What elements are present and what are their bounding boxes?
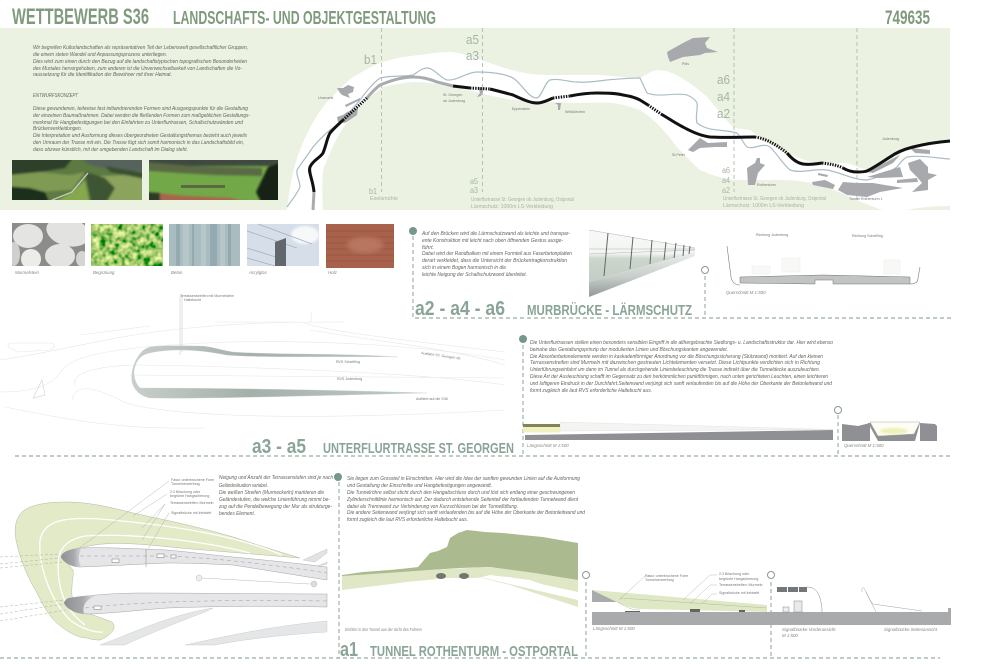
plan: terrace lines: [40, 518, 282, 632]
text: Unterflurtrassen: Unterführungseinfahrt um dann im Tunnel als durchgehende Linienbeleuchtung die Trasse indirekt über die Tunneldecke auszuleuchten.: [530, 367, 820, 373]
material: Holz: Holz: [328, 270, 338, 275]
signal bridge views: M 1:500: [782, 633, 798, 638]
text: Lärmschutz: Auf den Brücken wird die Lärmschutzwand als leichte und transpar-: [421, 231, 570, 237]
text: Neigung: zug auf die Pendelbewegung der Mur als strukturge-: [218, 504, 332, 510]
signal bridge views: Signalbrücke Seitenansicht: [884, 627, 938, 632]
panel: a2-a4-a6 Murbrücke: [409, 227, 952, 320]
intro text: raussetzung für die Identifikation der Bewohner mit ihrer Heimat.: [33, 72, 172, 78]
town labels: Pöls: [682, 62, 689, 66]
cross section: Querschnitt M 1:500: [844, 443, 884, 448]
cross section: Querschnitt M 1:500: [726, 290, 766, 295]
section line: a3 a5: Lärmschutz: 1000m LS-Verkleidung: [471, 204, 553, 210]
text: Neigung: bendes Element.: [219, 511, 255, 517]
text: Unterflurtrassen: Die Unterflurtrassen stellen einen besonders sensiblen Eingriff in die althergebrachte Siedlungs- u. Landschaftsstruktur dar. Hier wird ebenso: [530, 340, 833, 346]
text: Unterflurtrassen: formt zugleich die laut RVS erforderliche Haltebucht aus.: [530, 388, 652, 394]
map background: [0, 28, 950, 210]
material: Murmelstein: [12, 223, 85, 274]
marker open: [834, 406, 842, 414]
text: Unterflurtrassen: Diese Art der Ausleuchtung schafft im Gegensatz zu den herkömmlichen punktförmigen, nach unten gerichteten Leuchten, einen leichteren: [530, 374, 828, 380]
plan: labels: RVS Judenburg: [337, 377, 362, 381]
text: Neigung: Geländestufen, die welche Linienführung nimmt be-: [219, 497, 330, 503]
longitudinal section: Terrassenstreifen: Murmeln: [719, 583, 763, 587]
cross section: Richtung Judenburg: [756, 233, 788, 237]
bridge rendering: [589, 230, 695, 297]
text: Unterflurtrassen: [530, 340, 833, 394]
longitudinal section: begrünte Hangsicherung: [719, 577, 758, 581]
town labels: [318, 62, 899, 201]
marker filled: [409, 227, 417, 235]
towns: [337, 37, 937, 197]
longitudinal section: [592, 572, 771, 631]
text: Einschnitte: formt zugleich die laut RVS erforderliche Haltebucht aus.: [347, 517, 468, 523]
plan: labels: Ausfahrt ST. Georgen ob: [421, 351, 461, 360]
text: Lärmschutz: derart verkleidet, dass die Untersicht der Brückentragkonstruktion: [422, 258, 567, 264]
text: Einschnitte: Sie liegen zum Grossteil in Einschnitten. Hier wird die Idee der sanften gewunden Linien auf die Ausformung: [347, 476, 581, 482]
subtitle: LANDSCHAFTS- UND OBJEKTGESTALTUNG: [173, 8, 436, 28]
town labels: Unzmarkt: [318, 96, 333, 100]
title: WETTBEWERB S36: [12, 4, 149, 29]
text: Neigung: Geländesituation variabel.: [219, 483, 268, 489]
text: Lärmschutz: [421, 231, 572, 278]
plan: callouts: Tunnelverwerfung: [171, 482, 200, 486]
plan: labels: Auffahrt auf die S36: [416, 397, 448, 401]
section line: a3 a5: a5: [466, 32, 479, 47]
marker open right: [768, 572, 774, 578]
text: Unterflurtrassen: Die Absorberbetonelemente werden in kaskadenförmiger Anordnung vor die Böschungssicherung (Stützwand) montiert. Auf den kleinen: [530, 354, 823, 360]
heading a3 a5: a3 - a5: [252, 436, 306, 458]
text: Einschnitte: Zylinderschnittlinie harmonisch auf. Der dadurch entstehende Seitenteil der fortlaufenden Tunnelwand dient: [346, 497, 578, 503]
signal bridge views: [771, 587, 951, 638]
longitudinal section: Signalbrücke mit Infotafel: [719, 591, 760, 595]
town labels: Judenburg: [882, 137, 899, 141]
plan: callouts: Fassi: unterbrochene Form: [171, 478, 214, 482]
intro text: die einem steten Wandel und Anpassungsprozess unterliegen.: [33, 52, 167, 58]
section line: a3 a5: a3: [466, 48, 479, 63]
material: Beton: Beton: [171, 270, 183, 275]
plan: callouts: 2:3 Böschung oder: [170, 490, 201, 494]
section line: a2 a4 a6: [717, 28, 826, 209]
section line: b1: b1: [369, 187, 377, 196]
text: Einschnitte: und Gestaltung der Einschnitte und Hangbefestigungen angewandt.: [347, 483, 492, 489]
marker filled: [334, 473, 342, 481]
plan: labels: [180, 294, 461, 401]
intro text: Wir begreifen Kulturlandschaften als repräsentativen Teil der Lebenswelt gesellschaftlicher Gruppen,: [33, 45, 248, 51]
plan: site lines: [0, 295, 505, 428]
text: Unterflurtrassen: und luftigeren Eindruck in der Durchfahrt.Seitenwand verjüngt sich sanft verlaufenden bis auf die Höhe der Oberkante der Betonleitwand und: [530, 381, 833, 387]
section line: a2 a4 a6: a2: [717, 106, 730, 121]
text: Einschnitte: Die andere Seitenwand verjüngt sich sanft verlaufenden bis auf die Höhe der Oberkante der Betonleitwand und: [347, 510, 586, 516]
text: Einschnitte: dabei als Trennwand zur Verhinderung von Kurzschlüssen bei der Tunnellüftung.: [347, 504, 518, 510]
title Murbrücke: MURBRÜCKE - LÄRMSCHUTZ: [527, 302, 692, 319]
material: Beton: [169, 224, 240, 275]
town labels: Eppenstein: [512, 107, 530, 111]
town labels: Tunnel Rothenturm 1: [849, 197, 883, 201]
longitudinal section: 2:3 Böschung oder: [719, 572, 750, 576]
section line: a2 a4 a6: a2: [722, 186, 730, 195]
intro text: Diese gewundenen, teilweise fast initiandrierenden Formen sind Ausgangspunkte für die Gestaltung: [33, 106, 249, 112]
town labels: St.Peter: [672, 153, 686, 157]
plan: callouts: Terrassenstreifen: Murmeln: [170, 501, 214, 505]
text: Neigung: [218, 475, 333, 517]
intro text: Dies wird zum einen durch den Bezug auf die landschaftstypischen topografischen Besonderheiten: [33, 59, 247, 65]
longitudinal section: Tunnelverwerfung: [645, 578, 674, 582]
section line: a2 a4 a6: a4: [717, 89, 730, 104]
intro text: ENTWURFSKONZEPT: [33, 93, 78, 99]
cross section: [842, 422, 937, 448]
marker open: [702, 266, 708, 274]
text: Lärmschutz: ente Konstruktion mit leicht nach oben öffnenden Gestus ausge-: [422, 238, 563, 244]
plan: lower road: [64, 593, 327, 614]
intro text: den Umraum der Trasse mit ein. Die Trasse fügt sich somit harmonisch in das Landschaftsbild ein,: [33, 140, 244, 146]
section line: a3 a5: a3: [470, 186, 478, 195]
title Tunnel Rothenturm: TUNNEL ROTHENTURM - OSTPORTAL: [370, 643, 578, 660]
text: Unterflurtrassen: Terrassenstreifen sind Murmeln mit dazwischen gestreuten Lichtelementen versetzt. Diese Lichtpunkte verdichten sich in Richtung: [530, 360, 821, 366]
intro text: der einzelnen Baumaßnahmen. Dabei werden die fließenden Formen zum maßgeblichen Gestaltungs-: [33, 113, 250, 119]
section line: b1: Eselsmühle: [370, 196, 398, 202]
section line: a2 a4 a6: a4: [722, 176, 730, 185]
frame lines: [15, 345, 950, 456]
plan: tunnel walls: [132, 346, 427, 398]
intro text: merkmal für Hangbefestigungen bei den Einfahrten zu Unterflurtrassen, Schallschutzwänden und: [33, 120, 244, 126]
plan: labels: RVS Scheifling: [336, 360, 360, 364]
plan: callouts: [78, 478, 214, 549]
plan: green embankment: [15, 502, 300, 640]
intro text: [33, 45, 250, 153]
town labels: Weißkirchen: [565, 110, 585, 114]
heading a2 a4 a6: a2 - a4 - a6: [415, 298, 505, 320]
title Unterflurtrasse: UNTERFLURTRASSE ST. GEORGEN: [323, 440, 514, 457]
road S36: [310, 77, 950, 210]
plan: secondary ramps and dashed tunnel lines: [0, 549, 327, 645]
material: Acrylglas: [247, 224, 319, 275]
text: Unterflurtrassen: beinahe das Gestaltungsprinzip der modulierten Linien und Böschungskanten angewendet.: [530, 347, 728, 353]
panel: a1 Tunnel Rothenturm: [0, 473, 951, 661]
photo: green field: [149, 160, 278, 200]
section line: a1: [856, 28, 858, 200]
intro text: Die Interpretation und Ausformung dieses übergeordneten Gestaltungsthemas bezieht auch jeweils: [33, 133, 247, 139]
section line: b1: b1: [364, 52, 377, 67]
material: Begrünung: Begrünung: [93, 270, 115, 275]
panel: materials: [12, 223, 394, 275]
intro text: Brückenverkleidungen.: [33, 126, 82, 132]
photo: valley aerial: [12, 160, 142, 200]
material: Murmelstein: Murmelstein: [15, 270, 39, 275]
text: Lärmschutz: leichte Neigung der Schallschutzwand überleitet.: [422, 272, 527, 278]
material: Holz: [326, 224, 394, 275]
marker open left: [582, 572, 590, 578]
town labels: Rothenturm: [757, 183, 776, 187]
project number: 749635: [885, 8, 930, 29]
text: Einschnitte: [346, 476, 586, 523]
longitudinal section: [523, 422, 833, 448]
text: Neigung: Die weißen Streifen (Murmeckerln) markieren die: [219, 490, 324, 496]
plan: callouts: begrünte Hangsicherung: [170, 494, 209, 498]
tunnel portal view: [342, 530, 578, 632]
section line: a3 a5: [466, 28, 574, 210]
section line: a2 a4 a6: Unterflurtrasse St. Georgen ob Judenburg, Ostportal: [723, 196, 826, 202]
town labels: St. Georgen: [443, 93, 462, 97]
intro text: des Murtales hervorgehoben, zum anderen ist die Unverwechselbarkeit von Landschaften die Vo-: [33, 66, 242, 72]
intro text: dass obzwar künstlich, mit der umgebenden Landschaft im Dialog steht.: [33, 147, 188, 153]
cross section: Richtung Scheifling: [852, 234, 883, 238]
plan: labels: Terrassenstreifen mit Murmelstein: [180, 294, 234, 298]
panel: a3-a5 Unterflurtrasse: [0, 294, 950, 458]
material: Begrünung: [91, 224, 163, 275]
section line: b1: [364, 28, 398, 202]
longitudinal section: Längsschnitt M 1:500: [593, 626, 635, 631]
frame lines: [413, 236, 952, 318]
river: [287, 68, 950, 207]
frame lines: [0, 482, 940, 658]
text: Neigung: Neigung und Anzahl der Terrassenstufen sind je nach: [219, 475, 333, 481]
marker filled: [519, 335, 527, 343]
section line: a2 a4 a6: a6: [717, 72, 730, 87]
section line: a2 a4 a6: Lärmschutz: 1000m LS-Verkleidung: [723, 203, 804, 209]
tunnel portal view: Einfahrt in den Tunnel aus der Sicht des Fahrers: [345, 627, 423, 632]
plan: upper road: [61, 548, 327, 580]
longitudinal section: Längsschnitt M 1:500: [527, 443, 569, 448]
signal bridge views: Signalbrücke Vorderansicht: [782, 627, 836, 632]
section line: a3 a5: a5: [470, 177, 478, 186]
panel: route map: [0, 28, 950, 210]
plan: labels: Hallebucht: [184, 298, 201, 302]
longitudinal section: Fassi: unterbrochene Form: [645, 574, 688, 578]
valley floor: [287, 52, 950, 210]
town labels: ob Judenburg: [443, 99, 465, 103]
cross section: [726, 233, 920, 295]
text: Einschnitte: Die Tunnelröhre selbst sticht durch den Hangabschluss durch und löst sich entlang einer geschwungenen: [347, 490, 575, 496]
heading a1: a1: [340, 639, 358, 661]
text: Lärmschutz: führt.: [422, 245, 434, 251]
material: Acrylglas: Acrylglas: [248, 270, 268, 275]
text: Lärmschutz: sich in einem Bogen harmonisch in die: [422, 265, 506, 271]
section line: a2 a4 a6: a6: [722, 166, 730, 175]
section line: a3 a5: Unterflurtrasse St. Georgen ob Judenburg, Ostportal: [471, 197, 574, 203]
text: Lärmschutz: Dabei wird der Randbalken mit einem Formteil aus Faserbetonplatten: [422, 251, 572, 257]
header: [12, 4, 930, 29]
plan: callouts: Signalbrücke mit Infotafel: [171, 511, 212, 515]
